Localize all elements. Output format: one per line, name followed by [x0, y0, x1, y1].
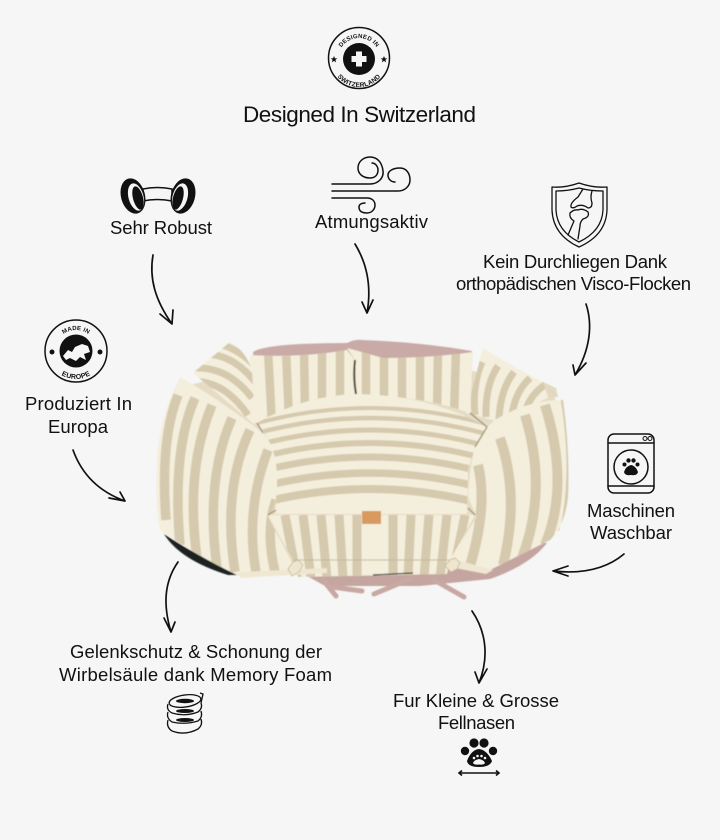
cushion creases — [354, 360, 356, 394]
icon: wind — [332, 157, 410, 213]
dark underside — [164, 534, 240, 575]
left side cushion — [156, 377, 292, 576]
icon: made in Europe badge: EUROPE — [62, 370, 90, 380]
arrow: Waschbar to bed — [553, 554, 624, 576]
label: Kein Durchliegen Dank — [456, 251, 691, 294]
label: Gelenkschutz: Wirbelsäule dank Memory Foam — [59, 664, 332, 685]
right side cushion — [451, 400, 569, 570]
upper left cushion — [193, 342, 255, 424]
icon: paw with size arrow — [459, 738, 499, 776]
label: Maschinen Waschbar — [587, 500, 675, 543]
icon: shield with knee joint — [552, 183, 607, 247]
right corner tab — [543, 382, 558, 397]
label: Fur Kleine & Grosse Fellnasen: Fellnasen — [438, 712, 515, 733]
bottom tie strips — [240, 558, 493, 578]
icon: designed in Switzerland badge: SWITZERLAND — [338, 74, 380, 88]
front flap — [268, 514, 474, 578]
heading: Designed In Switzerland — [243, 102, 476, 127]
arrow: bed to Gelenkschutz — [164, 562, 178, 632]
back right cushion — [347, 348, 473, 412]
arrow: Visco-Flocken to bed — [573, 304, 590, 375]
label: Sehr Robust: Sehr Robust — [110, 217, 212, 238]
arrow: bed to Fellnasen — [472, 611, 487, 683]
leather tag — [362, 511, 381, 524]
pink base and ties — [300, 540, 547, 586]
label: Fur Kleine & Grosse Fellnasen: Fur Kleine & Grosse — [393, 690, 559, 711]
label: Maschinen Waschbar: Maschinen — [587, 500, 675, 521]
pink back cushion — [253, 340, 472, 380]
zip slit — [373, 573, 413, 575]
back left cushion — [250, 350, 356, 423]
icon: dumbbell — [117, 176, 199, 216]
arrow: Europa to bed — [73, 450, 125, 501]
icon: made in Europe badge — [44, 319, 108, 383]
label: Produziert In Europa: Produziert In — [25, 393, 132, 414]
arrow: Sehr Robust to bed — [152, 255, 173, 324]
bow knots — [288, 558, 460, 576]
label: Kein Durchliegen Dank: Kein Durchliegen Dank — [483, 251, 668, 272]
label: Produziert In Europa: Europa — [48, 416, 109, 437]
label: Gelenkschutz: Gelenkschutz & Schonung der — [70, 641, 322, 662]
label: Kein Durchliegen Dank: orthopädischen Visco-Flocken — [456, 273, 691, 294]
seat cushion — [250, 390, 490, 518]
icon: spring — [168, 693, 203, 733]
label: Fur Kleine & Grosse Fellnasen — [393, 690, 559, 733]
label: Produziert In Europa — [25, 393, 132, 437]
label: Atmungsaktiv: Atmungsaktiv — [315, 211, 429, 232]
icon: designed in Switzerland badge: DESIGNED IN — [338, 34, 380, 48]
icon: designed in Switzerland badge — [328, 26, 390, 90]
label: Maschinen Waschbar: Waschbar — [590, 522, 672, 543]
product: striped dog bed — [150, 340, 573, 597]
arrow: Atmungsaktiv to bed — [355, 244, 373, 313]
label: Gelenkschutz — [59, 641, 332, 685]
upper right cushion — [466, 348, 548, 420]
icon: washing machine — [608, 434, 654, 493]
icon: made in Europe badge: MADE IN — [62, 326, 90, 334]
cushion backing — [175, 370, 560, 565]
